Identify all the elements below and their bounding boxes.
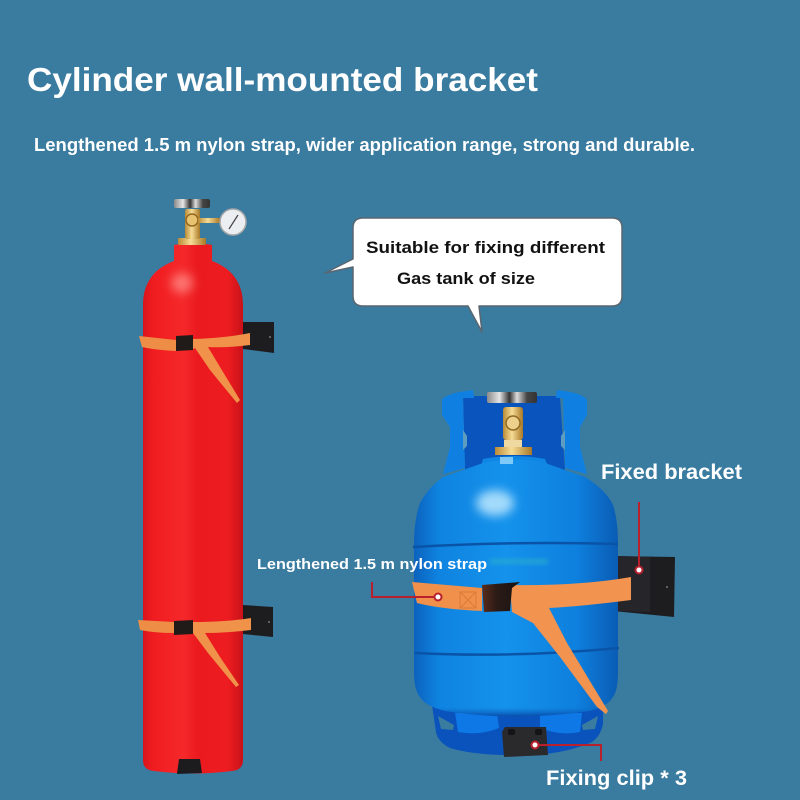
icon: bottom fixing clip <box>177 759 202 774</box>
tank body <box>414 460 618 716</box>
pointer: fixing clip <box>532 742 601 761</box>
tank ribs <box>413 543 619 655</box>
collar highlight <box>500 457 513 464</box>
title: Cylinder wall-mounted bracket <box>27 61 538 98</box>
icon: upper wall bracket <box>243 322 274 353</box>
blurred background patch <box>490 559 548 564</box>
red gas cylinder <box>138 199 274 774</box>
icon: bottom fixing clip <box>502 727 548 757</box>
icon: tank valve <box>487 392 537 455</box>
body highlight <box>476 490 514 516</box>
label: fixing clip: Fixing clip * 3 <box>546 767 687 790</box>
label: nylon strap: Lengthened 1.5 m nylon strap <box>257 556 487 573</box>
collar <box>478 456 552 476</box>
callout text line 1: Suitable for fixing different <box>366 238 605 257</box>
cylinder body <box>143 243 243 774</box>
icon: pressure valve and gauge <box>174 199 246 245</box>
callout text line 2: Gas tank of size <box>397 269 535 288</box>
buckle <box>482 582 520 612</box>
icon: fixed wall bracket <box>613 556 675 617</box>
valve recess back plate <box>463 396 565 470</box>
lower orange strap <box>138 618 251 687</box>
upper orange strap <box>139 333 250 403</box>
label: fixed bracket: Fixed bracket <box>601 461 742 484</box>
blue gas tank <box>412 390 675 757</box>
left handle pillar <box>442 390 474 474</box>
subtitle: Lengthened 1.5 m nylon strap, wider application range, strong and durable. <box>34 135 695 155</box>
pointer: fixed bracket <box>636 502 642 574</box>
body bottom shading <box>414 640 618 716</box>
foot ring panels <box>455 713 582 733</box>
foot ring cutouts <box>438 716 598 730</box>
icon: lower wall bracket <box>243 605 273 637</box>
strap stitching <box>460 592 476 608</box>
right handle pillar <box>556 390 587 474</box>
highlight <box>171 273 193 293</box>
foot ring <box>432 705 603 755</box>
orange nylon strap <box>412 577 631 714</box>
handle side notches <box>463 430 565 450</box>
pointer: nylon strap <box>372 582 442 600</box>
callout: speech bubble <box>325 218 622 332</box>
